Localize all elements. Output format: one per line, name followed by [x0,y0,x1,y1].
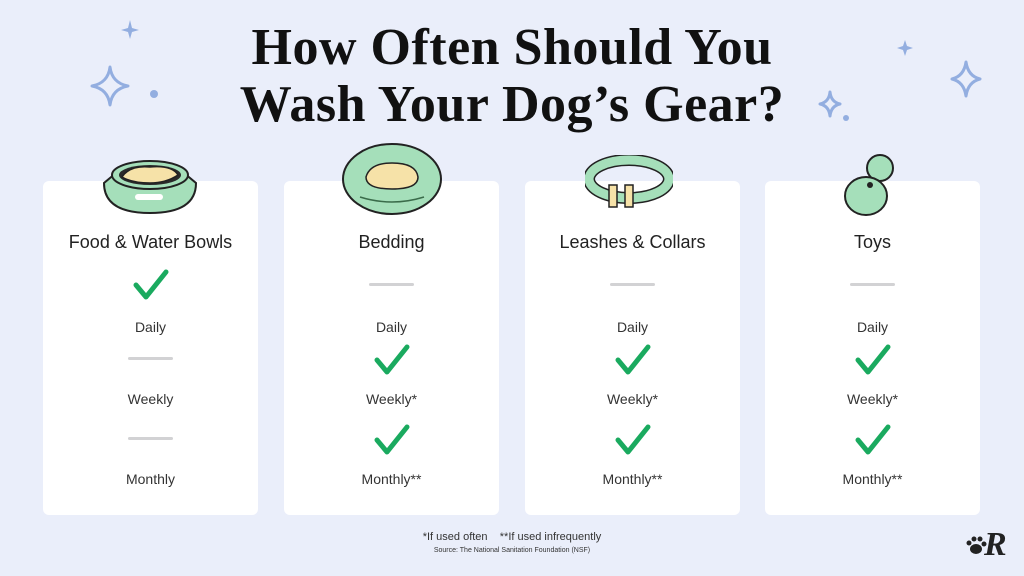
icon: food bowl [103,160,197,214]
panel: toys: Weekly* [847,391,898,407]
title: Wash Your Dog’s Gear? [240,76,784,133]
panel: food & water bowls: Weekly [128,391,173,407]
panel: bedding: Monthly** [362,471,421,487]
panel: leashes & collars: Monthly** [603,471,662,487]
panel: toys: Toys [854,232,891,252]
panel: leashes & collars: Daily [617,319,648,335]
panel: toys: Daily [857,319,888,335]
panel: food & water bowls: Monthly [126,471,175,487]
panel: bedding: Bedding [358,232,425,252]
panel: bedding: Daily [376,319,407,335]
panel: leashes & collars: Weekly* [607,391,658,407]
title: How Often Should You [252,19,772,76]
panel: food & water bowls: Food & Water Bowls [69,232,232,252]
panel: food & water bowls: Daily [135,319,166,335]
panel: food & water bowls [43,181,258,515]
icon: collar [585,155,673,208]
icon: toy [844,154,894,216]
panel: toys [765,181,980,515]
icon: dog bed [342,143,442,215]
panel: toys: Monthly** [843,471,902,487]
panel: bedding [284,181,499,515]
panel: leashes & collars [525,181,740,515]
decorative sparkles [90,20,982,121]
panel: leashes & collars: Leashes & Collars [559,232,706,252]
logo [966,526,1007,563]
footnote: *If used often **If used infrequently [423,531,601,543]
title [240,19,784,133]
logo: R [984,526,1007,563]
source: Source: The National Sanitation Foundation (NSF) [434,547,590,554]
panel: bedding: Weekly* [366,391,417,407]
